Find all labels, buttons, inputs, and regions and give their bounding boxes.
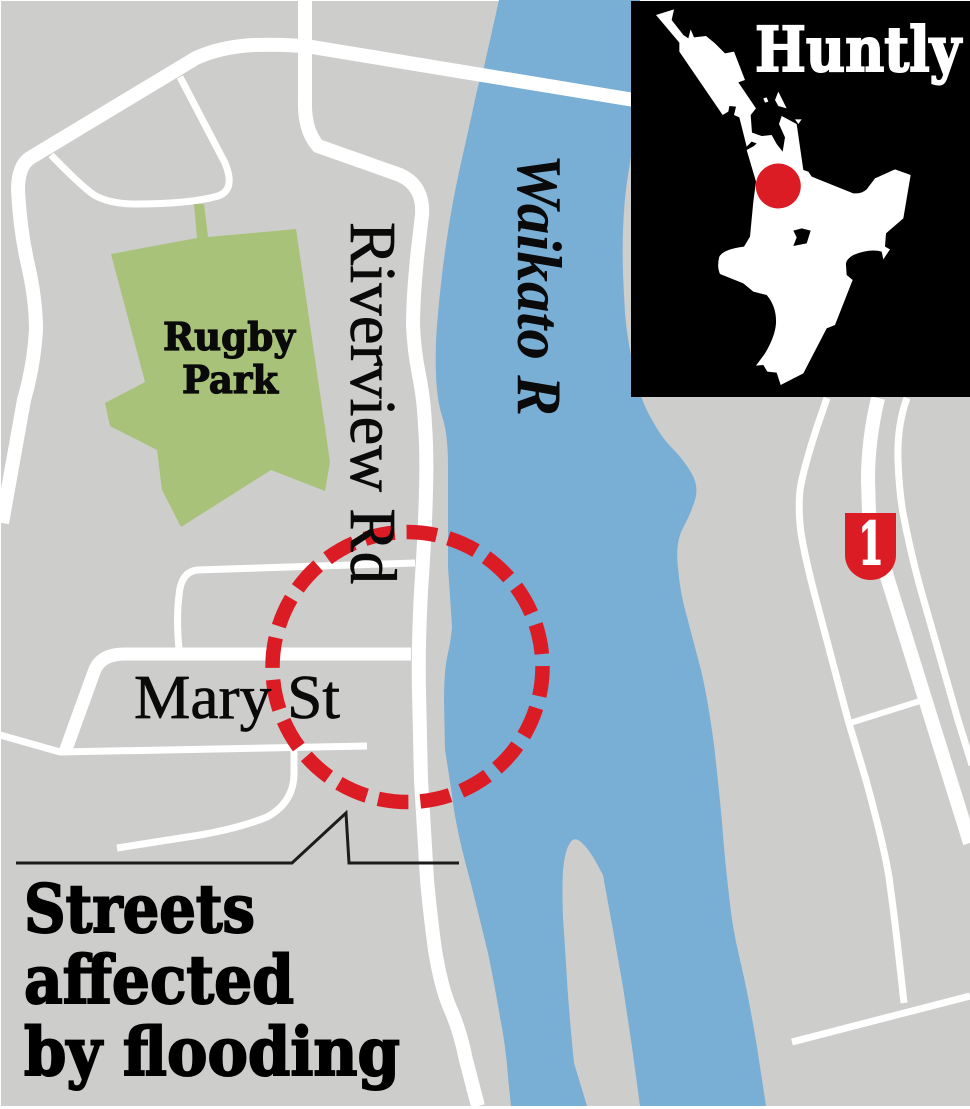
label: Rugby Park: Park (182, 357, 279, 402)
North Island silhouette (656, 9, 911, 385)
road: Mary St (65, 654, 411, 752)
road: eastern cross street (850, 701, 920, 723)
flood zone dashed circle (272, 531, 543, 803)
road: Riverview Rd (305, 0, 478, 1106)
callout leader line (16, 813, 459, 863)
callout: streets affected by flooding: Streets (24, 870, 255, 948)
park shape (105, 204, 330, 527)
inset locator map panel (631, 1, 970, 397)
label: Mary St: Mary St (134, 664, 340, 732)
highway shield: State Highway 1 (845, 510, 896, 580)
shield shape (845, 513, 896, 580)
road: southern branch (117, 750, 294, 848)
road: upper side street (178, 563, 415, 648)
callout: streets affected by flooding: affected (24, 941, 294, 1019)
label: Waikato R: Waikato R (504, 154, 575, 416)
inset background (631, 1, 970, 397)
lake Taupo (793, 228, 811, 246)
road: south-east street (792, 996, 970, 1042)
callout: streets affected by flooding: by flooding (24, 1013, 400, 1091)
Waikato River (436, 0, 766, 1106)
road: State Highway 1 (868, 398, 970, 843)
Rugby Park area (105, 204, 330, 527)
road: bridge and western loop (2, 45, 640, 523)
road: lower side street (0, 735, 367, 752)
offshore islands (763, 92, 802, 124)
road: eastern thin road (799, 398, 904, 1003)
road: eastern service road (898, 398, 970, 765)
island outline (656, 9, 911, 385)
road: park loop (51, 77, 229, 204)
location marker: Huntly (756, 164, 801, 208)
label: Rugby Park: Rugby (163, 314, 296, 359)
label: Riverview Rd: Riverview Rd (336, 222, 409, 584)
shield number: 1 (858, 510, 884, 578)
